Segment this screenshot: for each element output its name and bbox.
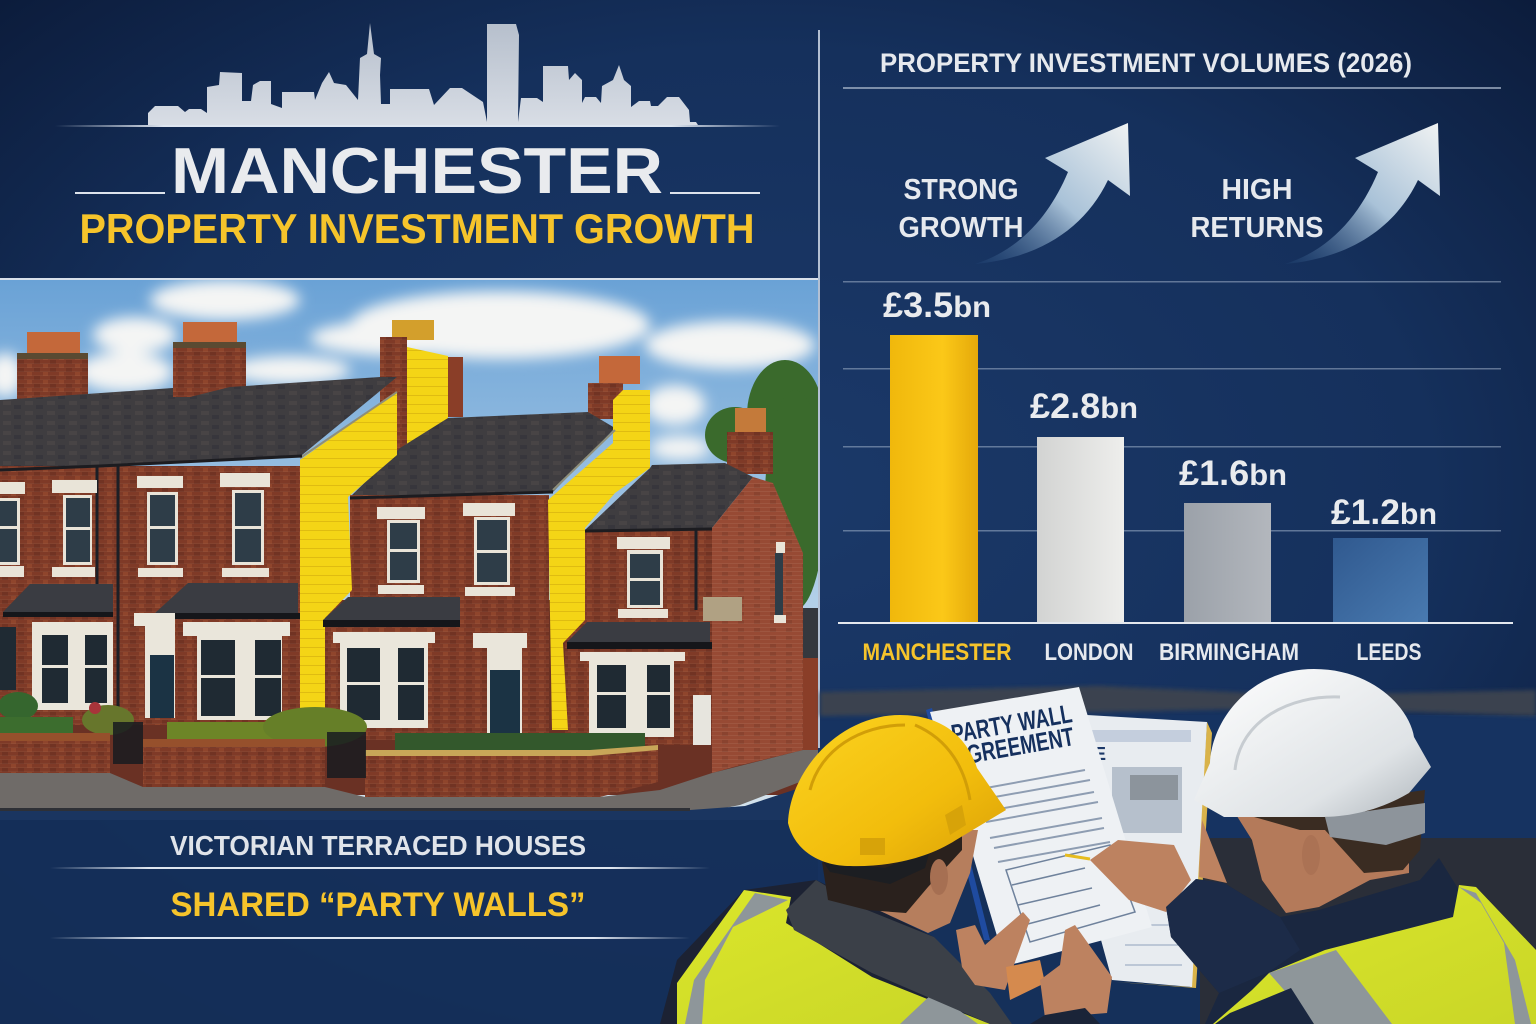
front document	[926, 687, 1152, 966]
bay windows	[32, 613, 685, 737]
hands	[956, 820, 1227, 1018]
left vest reflective stripes	[685, 893, 978, 1024]
callout: strong growth	[898, 123, 1130, 264]
worker left head	[867, 830, 978, 933]
callout: high returns: HIGH	[1222, 174, 1292, 206]
doors	[150, 655, 520, 733]
right vest reflective stripes	[1269, 887, 1531, 1024]
bar chart	[838, 281, 1513, 666]
callout: high returns: RETURNS	[1190, 212, 1324, 244]
skyline illustration	[148, 23, 698, 125]
road	[0, 790, 796, 820]
left vest	[677, 890, 990, 1024]
document heading: PARTY WALL	[949, 698, 1074, 749]
tree	[705, 360, 825, 610]
caption rule lower	[50, 937, 690, 939]
helmet strap	[1325, 803, 1425, 845]
bar: Leeds: £1.2bn	[1331, 493, 1437, 532]
roofs	[0, 377, 397, 470]
worker right head	[1235, 800, 1409, 913]
callout: strong growth: GROWTH	[898, 212, 1024, 244]
utility box	[693, 695, 711, 745]
divider: horizontal	[0, 278, 818, 280]
title rule left	[75, 192, 165, 194]
worker right body	[1166, 858, 1459, 1024]
yellow party walls	[300, 392, 397, 708]
gutters	[300, 392, 615, 490]
bar: Birmingham: £1.6bn	[1179, 454, 1287, 493]
worker right ear	[1302, 835, 1320, 875]
stone block	[703, 597, 742, 621]
skyline base line	[55, 125, 780, 127]
callout: strong growth: STRONG	[904, 174, 1018, 206]
bar: Leeds	[1331, 493, 1437, 666]
title rule right	[670, 192, 760, 194]
brick walls	[0, 466, 300, 725]
subheading: PROPERTY INVESTMENT GROWTH	[80, 205, 754, 252]
document lines	[975, 770, 1110, 862]
worker left ear	[930, 859, 948, 895]
worker left body	[660, 880, 1012, 1024]
bar: Manchester	[862, 286, 1012, 666]
arrow: returns	[1285, 123, 1440, 264]
caption rule	[50, 867, 710, 869]
pavement	[0, 750, 818, 815]
chimney: third	[380, 320, 463, 455]
heading rule	[843, 87, 1501, 89]
worker right hair	[1247, 790, 1425, 873]
helmet: yellow	[788, 715, 1006, 866]
axis line	[838, 622, 1513, 624]
upper windows	[0, 473, 670, 618]
eaves	[0, 456, 712, 531]
bar: Birmingham	[1159, 454, 1299, 666]
arrow: growth	[975, 123, 1130, 264]
callout: high returns	[1190, 123, 1440, 264]
bar: Birmingham: BIRMINGHAM	[1159, 639, 1299, 666]
porch roofs	[3, 583, 710, 642]
chimney: second	[173, 322, 246, 397]
back document: E	[1094, 744, 1106, 764]
sleeve bottom	[1030, 1008, 1100, 1024]
photo: Victorian terraced houses	[0, 280, 825, 825]
worker left hair	[822, 830, 962, 913]
photo background: lower right	[820, 686, 1536, 1024]
chimney: first	[17, 332, 88, 403]
caption: shared party walls: SHARED “PARTY WALLS”	[170, 886, 586, 924]
photo: workers with party wall agreement	[660, 669, 1536, 1024]
chimney: fourth	[588, 356, 640, 419]
garden walls and hedges	[0, 692, 658, 797]
downpipes	[97, 465, 696, 710]
chart heading: PROPERTY INVESTMENT VOLUMES (2026)	[880, 48, 1412, 78]
road transition	[0, 820, 818, 1024]
bar: Leeds: LEEDS	[1356, 639, 1422, 666]
bar: London	[1030, 387, 1138, 666]
bar: London: £2.8bn	[1030, 387, 1138, 426]
right lower collar	[1215, 988, 1314, 1024]
right vest	[1213, 885, 1536, 1024]
divider: vertical	[818, 30, 820, 748]
caption: Victorian terraced houses: VICTORIAN TERRACED HOUSES	[170, 830, 586, 861]
front document: AGREEMENT	[951, 721, 1076, 772]
left collar	[786, 880, 1012, 1024]
chimney: fifth	[727, 408, 773, 474]
worker left headband	[822, 850, 930, 884]
pencil	[1065, 855, 1090, 859]
panel: title area	[55, 23, 780, 252]
clouds	[0, 280, 815, 460]
neighbouring building	[803, 608, 818, 753]
sleeve: right worker arm	[1166, 879, 1300, 993]
back document	[1087, 715, 1212, 988]
bar: Manchester: MANCHESTER	[862, 639, 1012, 666]
bar: Manchester: £3.5bn	[883, 286, 991, 325]
helmet: white	[1194, 669, 1431, 817]
bar: London: LONDON	[1044, 639, 1134, 666]
heading: Manchester: MANCHESTER	[171, 134, 663, 207]
house base shadow	[0, 600, 803, 795]
